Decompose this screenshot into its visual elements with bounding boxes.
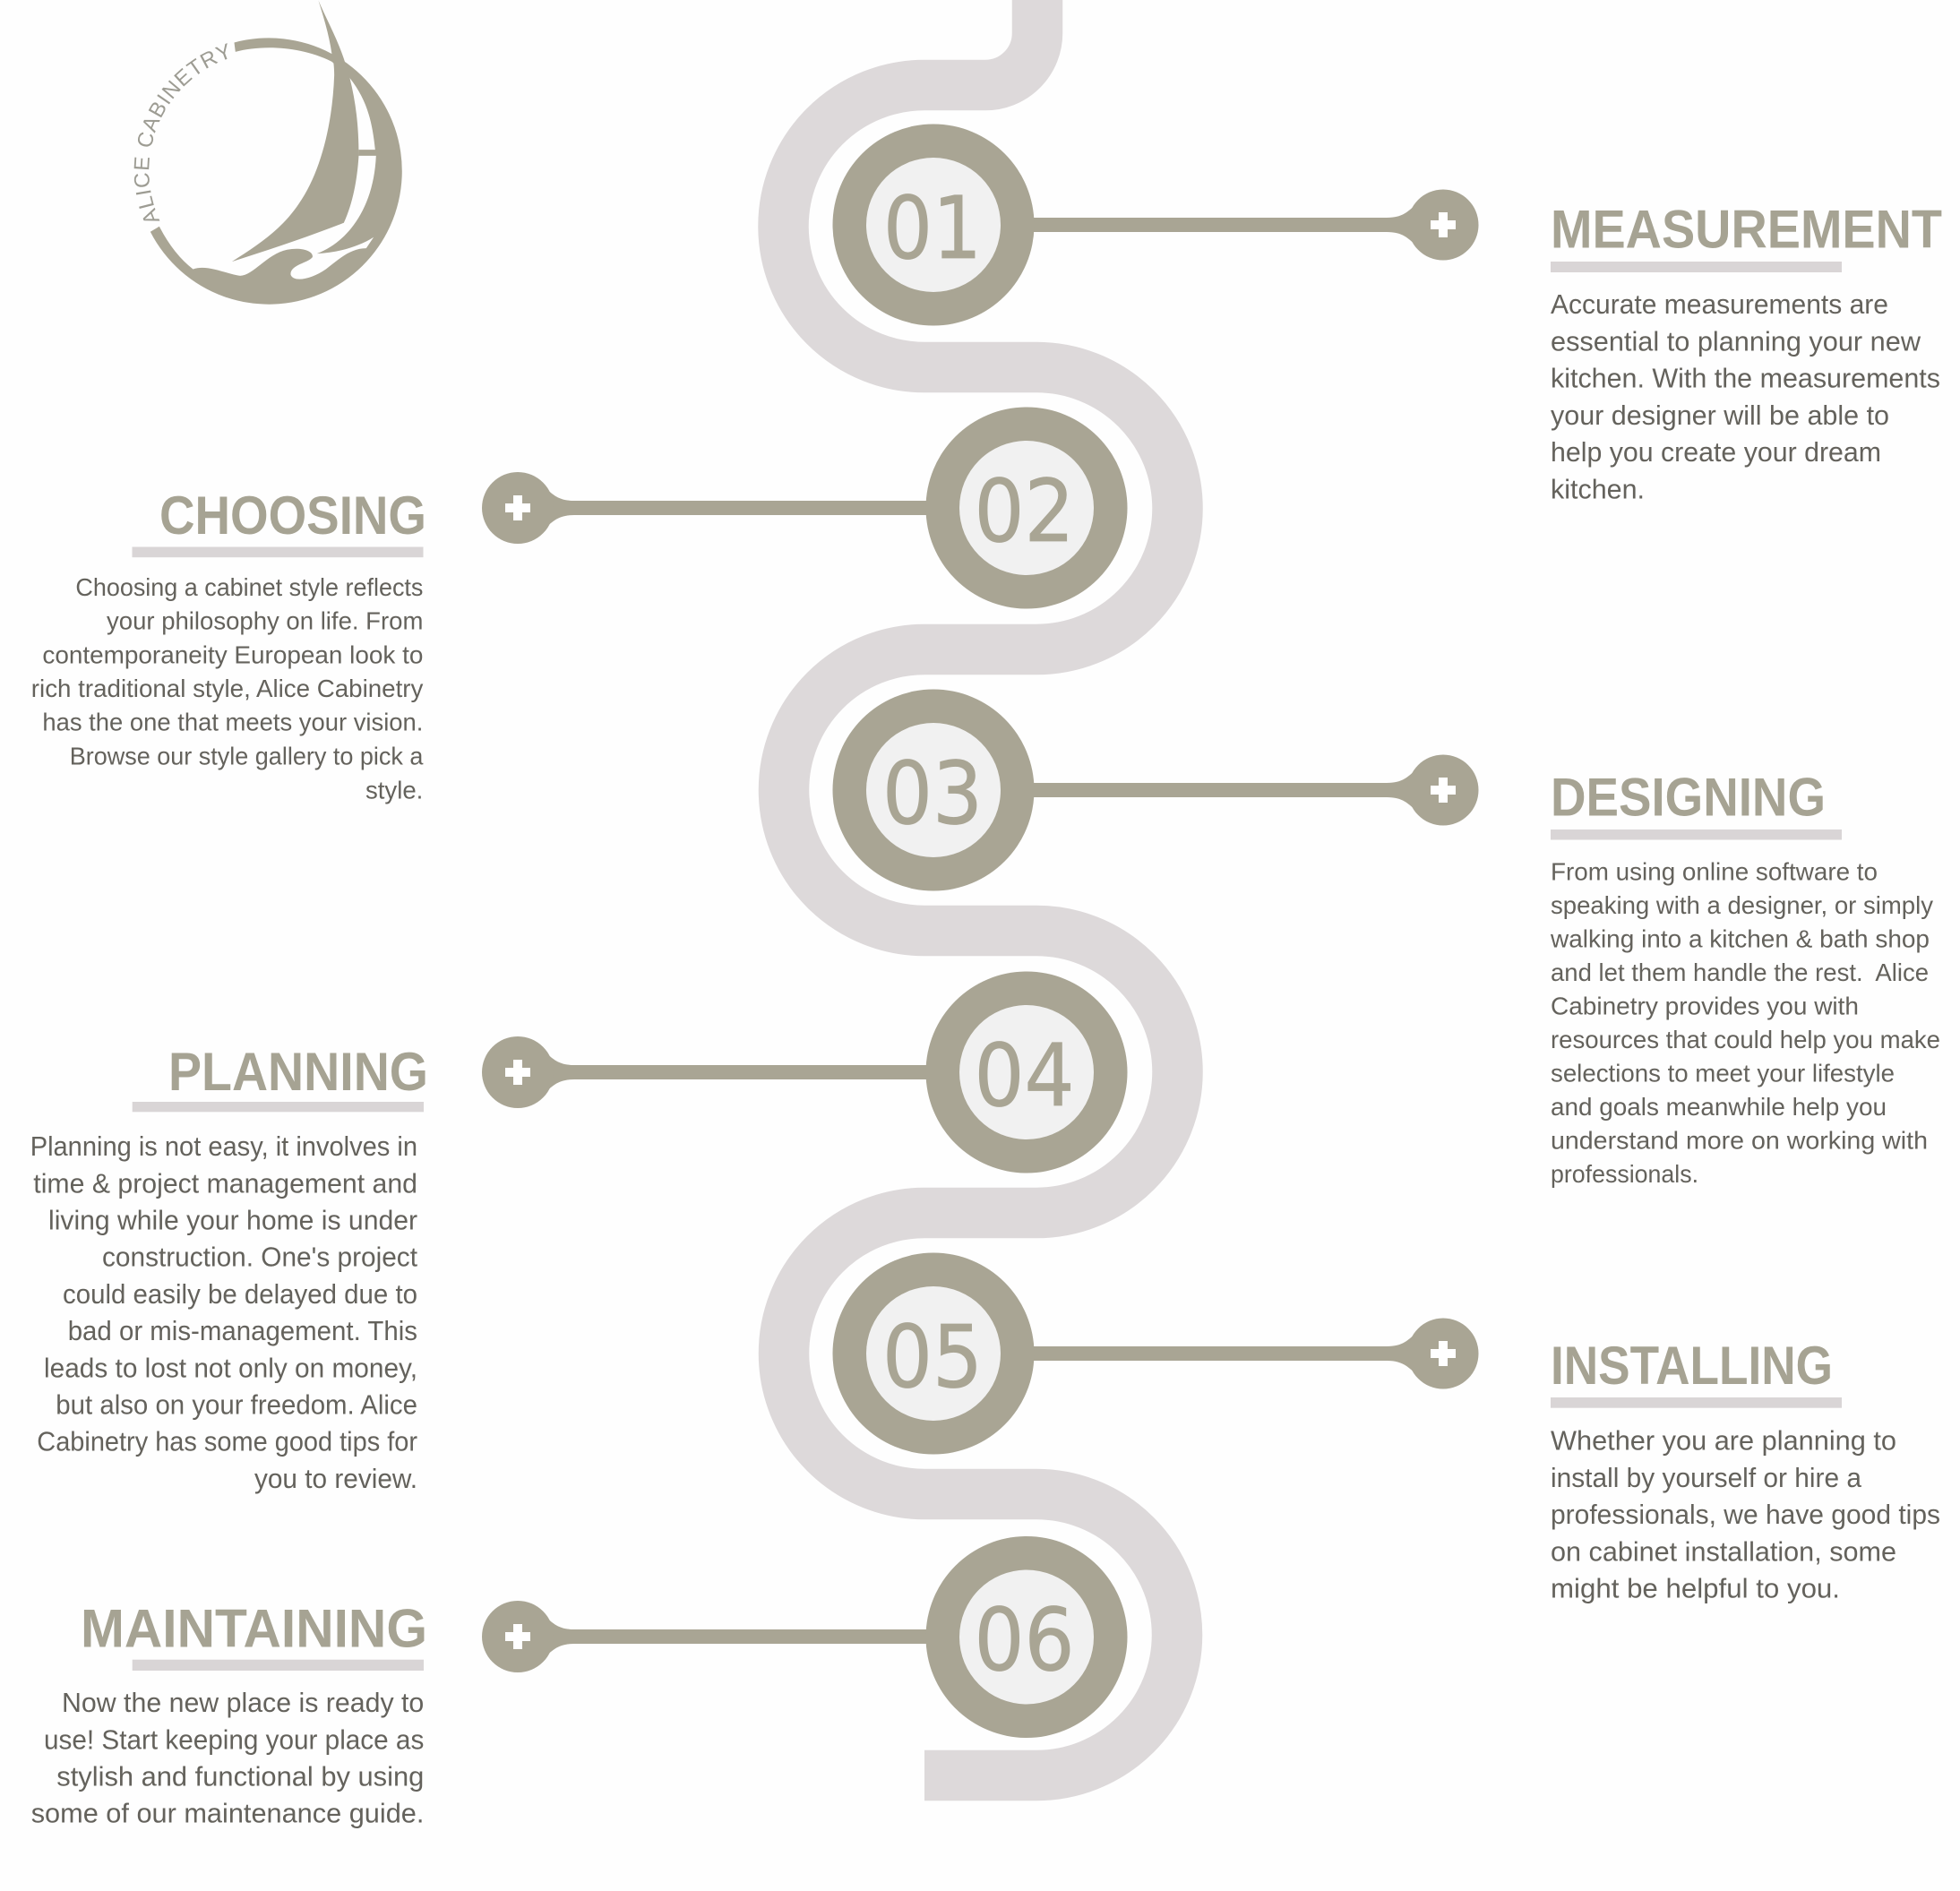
connector 01 [1021,190,1478,260]
panel: choosing [31,486,426,804]
body: measurement: Accurate measurements are [1551,288,1888,320]
body: designing: speaking with a designer, or simply [1551,891,1933,919]
heading: choosing: CHOOSING [159,486,426,546]
body: maintaining: Now the new place is ready to [62,1687,424,1718]
body: planning: time & project management and [33,1167,417,1199]
panel: measurement [1551,199,1942,505]
step circle 05: 05 [882,1307,983,1407]
step circle 02: 02 [975,461,1075,562]
body: maintaining: stylish and functional by using [56,1761,424,1792]
body: choosing: your philosophy on life. From [107,607,423,635]
body: choosing: contemporaneity European look to [42,641,423,668]
heading: installing: INSTALLING [1551,1336,1833,1396]
panel: installing [1551,1336,1940,1604]
body: planning: but also on your freedom. Alice [56,1388,417,1421]
heading: planning: PLANNING [168,1042,428,1102]
body: designing: walking into a kitchen & bath shop [1550,924,1930,952]
logo wordmark: ALICE CABINETRY [134,43,228,221]
body: measurement: kitchen. [1551,473,1645,505]
heading: maintaining: MAINTAINING [81,1598,427,1659]
step circle 05 [833,1252,1034,1455]
step circle 01 [833,124,1034,326]
body: choosing: Browse our style gallery to pick a [70,742,424,769]
body: planning: could easily be delayed due to [63,1278,417,1310]
body: designing: and let them handle the rest. Alice [1551,958,1929,986]
body: installing: professionals, we have good tips [1551,1499,1940,1530]
body: installing: on cabinet installation, some [1551,1535,1896,1567]
body: installing [1551,1424,1940,1604]
connector 06 [482,1601,941,1672]
connector 03 [1021,754,1478,826]
body: designing [1550,857,1940,1188]
body: installing: might be helpful to you. [1551,1573,1840,1604]
body: choosing: has the one that meets your vision. [42,709,423,736]
body: measurement: your designer will be able to [1551,400,1889,431]
body: maintaining: some of our maintenance guide. [31,1798,424,1829]
step circle 02 [926,407,1127,609]
panel: designing [1550,767,1940,1188]
step circle 04: 04 [975,1026,1075,1126]
body: planning: leads to lost not only on money, [44,1352,417,1383]
connector 04 [482,1036,941,1108]
body: measurement: essential to planning your new [1551,326,1921,357]
body: measurement: kitchen. With the measurements [1551,362,1940,394]
panel: maintaining [31,1598,427,1829]
body: planning: Planning is not easy, it involves in [30,1130,417,1162]
step circle 04 [926,971,1127,1173]
step circle 03: 03 [882,744,983,844]
logo: Alice Cabinetry sailboat [134,0,402,305]
panel: planning [30,1042,428,1494]
body: planning: bad or mis-management. This [68,1315,417,1346]
body: designing: professionals. [1551,1160,1698,1188]
winding path [783,0,1177,1775]
step circle 06 [926,1536,1127,1738]
body: designing: resources that could help you make [1551,1026,1940,1053]
body: planning [30,1130,417,1494]
step circle 03 [833,690,1034,890]
body: choosing: style. [365,776,423,804]
body: measurement: help you create your dream [1551,436,1881,468]
body: designing: selections to meet your lifestyle [1551,1059,1895,1087]
body: choosing [31,573,424,804]
connector 02 [482,472,941,544]
body: designing: Cabinetry provides you with [1551,992,1859,1019]
body: planning: you to review. [254,1463,417,1494]
body: maintaining: use! Start keeping your place as [44,1723,424,1755]
body: measurement [1551,288,1940,505]
body: installing: Whether you are planning to [1551,1424,1896,1456]
body: planning: living while your home is under [48,1204,417,1236]
body: planning: construction. One's project [102,1242,417,1273]
body: maintaining [31,1687,424,1829]
step circle 01: 01 [883,178,982,279]
body: installing: install by yourself or hire a [1551,1462,1862,1493]
step circle 06: 06 [975,1590,1075,1690]
body: designing: From using online software to [1551,857,1878,885]
logo ring and wave [150,0,402,305]
body: designing: and goals meanwhile help you [1551,1093,1887,1121]
body: designing: understand more on working with [1551,1126,1928,1154]
body: choosing: Choosing a cabinet style reflects [75,573,423,601]
heading: designing: DESIGNING [1551,767,1826,828]
body: choosing: rich traditional style, Alice Cabinetry [31,675,423,702]
connector 05 [1021,1319,1478,1388]
heading: measurement: MEASUREMENT [1551,199,1942,260]
body: planning: Cabinetry has some good tips for [37,1426,417,1457]
